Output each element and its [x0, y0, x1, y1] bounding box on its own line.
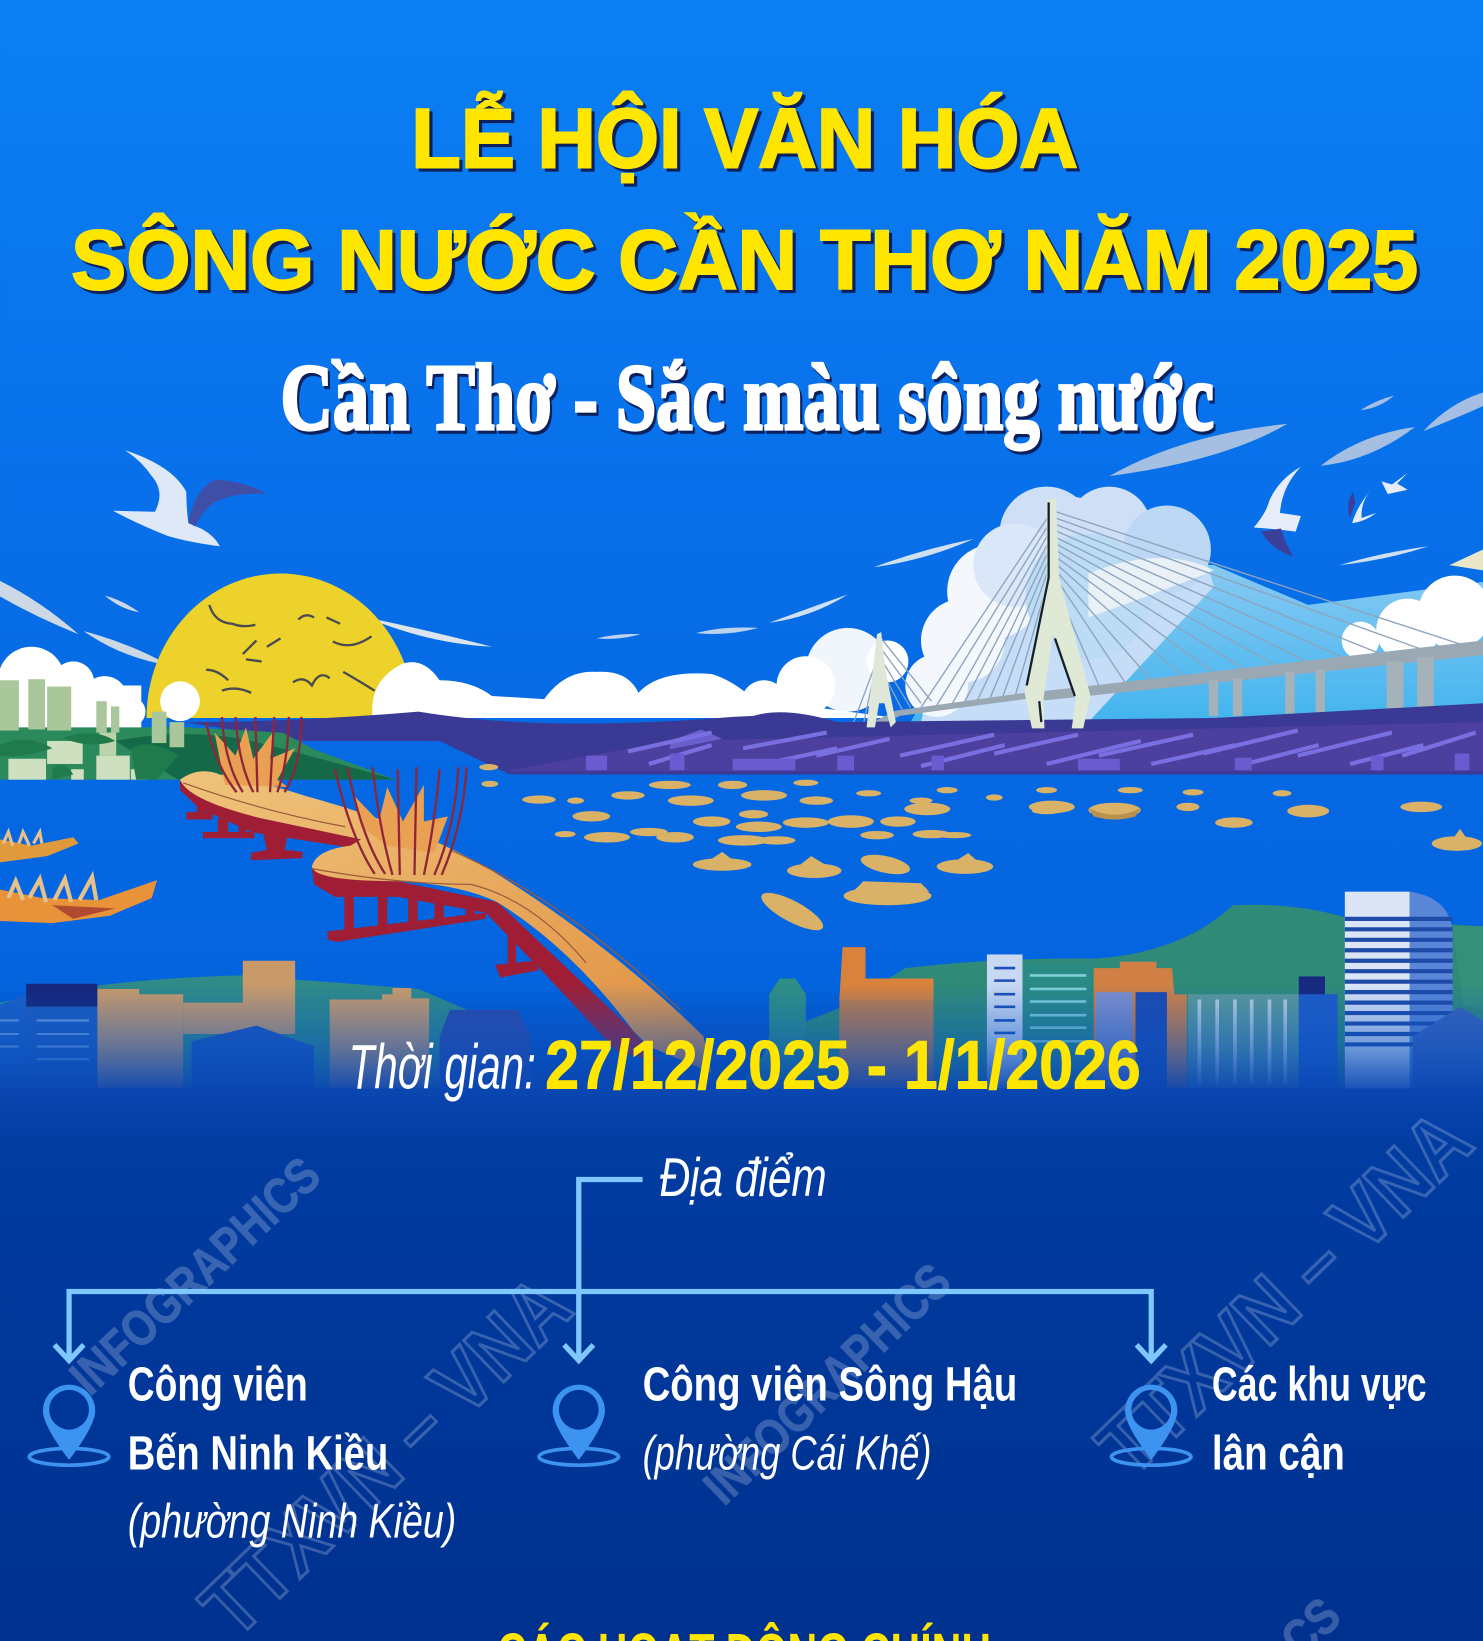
bottom skyline	[0, 892, 1483, 1088]
fade into dark blue	[0, 984, 1483, 1096]
title line 2: SÔNG NƯỚC CẦN THƠ NĂM 2025	[71, 212, 1418, 307]
bridge cables	[853, 511, 1465, 724]
title line 1: LỄ HỘI VĂN HÓA	[411, 90, 1078, 185]
icon: pin 2	[539, 1385, 619, 1465]
location 3 text	[1212, 1357, 1426, 1480]
subtitle: Cần Thơ - Sắc màu sông nước	[280, 346, 1214, 450]
clouds	[0, 487, 1483, 733]
clock tower	[738, 979, 837, 1088]
location 2	[539, 1357, 1017, 1480]
icon: small seagulls	[1254, 467, 1408, 557]
lotus flowers	[215, 727, 295, 787]
dragon bridge	[180, 717, 712, 1073]
location label: Địa điểm	[659, 1147, 827, 1208]
icon: pin 3	[1111, 1385, 1191, 1465]
location 1 text: Bến Ninh Kiều	[128, 1426, 388, 1480]
icon: pin 1	[29, 1385, 109, 1465]
sun	[147, 574, 414, 718]
location 1 text: (phường Ninh Kiều)	[128, 1494, 456, 1548]
light sky behind bridge	[911, 555, 1483, 722]
watermarks: INFOGRAPHICS	[693, 1253, 961, 1515]
watermarks: TTXVN – VNA	[183, 1258, 588, 1641]
lotus wire baskets	[206, 717, 467, 875]
floating boats	[479, 764, 1482, 937]
green hill and city	[0, 679, 396, 780]
arrows: location tree	[54, 1179, 1166, 1361]
deck	[864, 640, 1483, 728]
orange deck	[180, 771, 712, 1073]
watermarks: INFOGRAPHICS	[59, 1147, 331, 1405]
icon: large seagull	[113, 450, 267, 546]
cable-stayed bridge	[853, 511, 1483, 728]
birds over the sun	[206, 605, 375, 693]
date label: Thời gian:	[349, 1032, 536, 1102]
location 1 text: Công viên	[128, 1357, 308, 1411]
stilt houses	[510, 722, 1483, 771]
location 2 text: Công viên Sông Hậu	[643, 1357, 1017, 1411]
location 1	[29, 1357, 456, 1548]
date	[349, 1025, 1141, 1103]
title	[71, 90, 1418, 307]
dragon boats	[0, 832, 157, 923]
mountain band	[184, 703, 1483, 774]
red piers	[180, 781, 659, 1062]
sky wisps	[0, 392, 1483, 666]
location 3	[1111, 1357, 1426, 1480]
location 2 text: (phường Cái Khế)	[643, 1426, 931, 1480]
illustration: river landscape	[0, 392, 1483, 1096]
location 1 text	[128, 1357, 456, 1548]
location 2 text	[643, 1357, 1017, 1480]
watermarks	[59, 1092, 1483, 1641]
piers	[1209, 657, 1434, 716]
location 3 text: lân cận	[1212, 1426, 1345, 1480]
date value: 27/12/2025 - 1/1/2026	[545, 1025, 1141, 1103]
bridge towers	[867, 498, 1091, 728]
